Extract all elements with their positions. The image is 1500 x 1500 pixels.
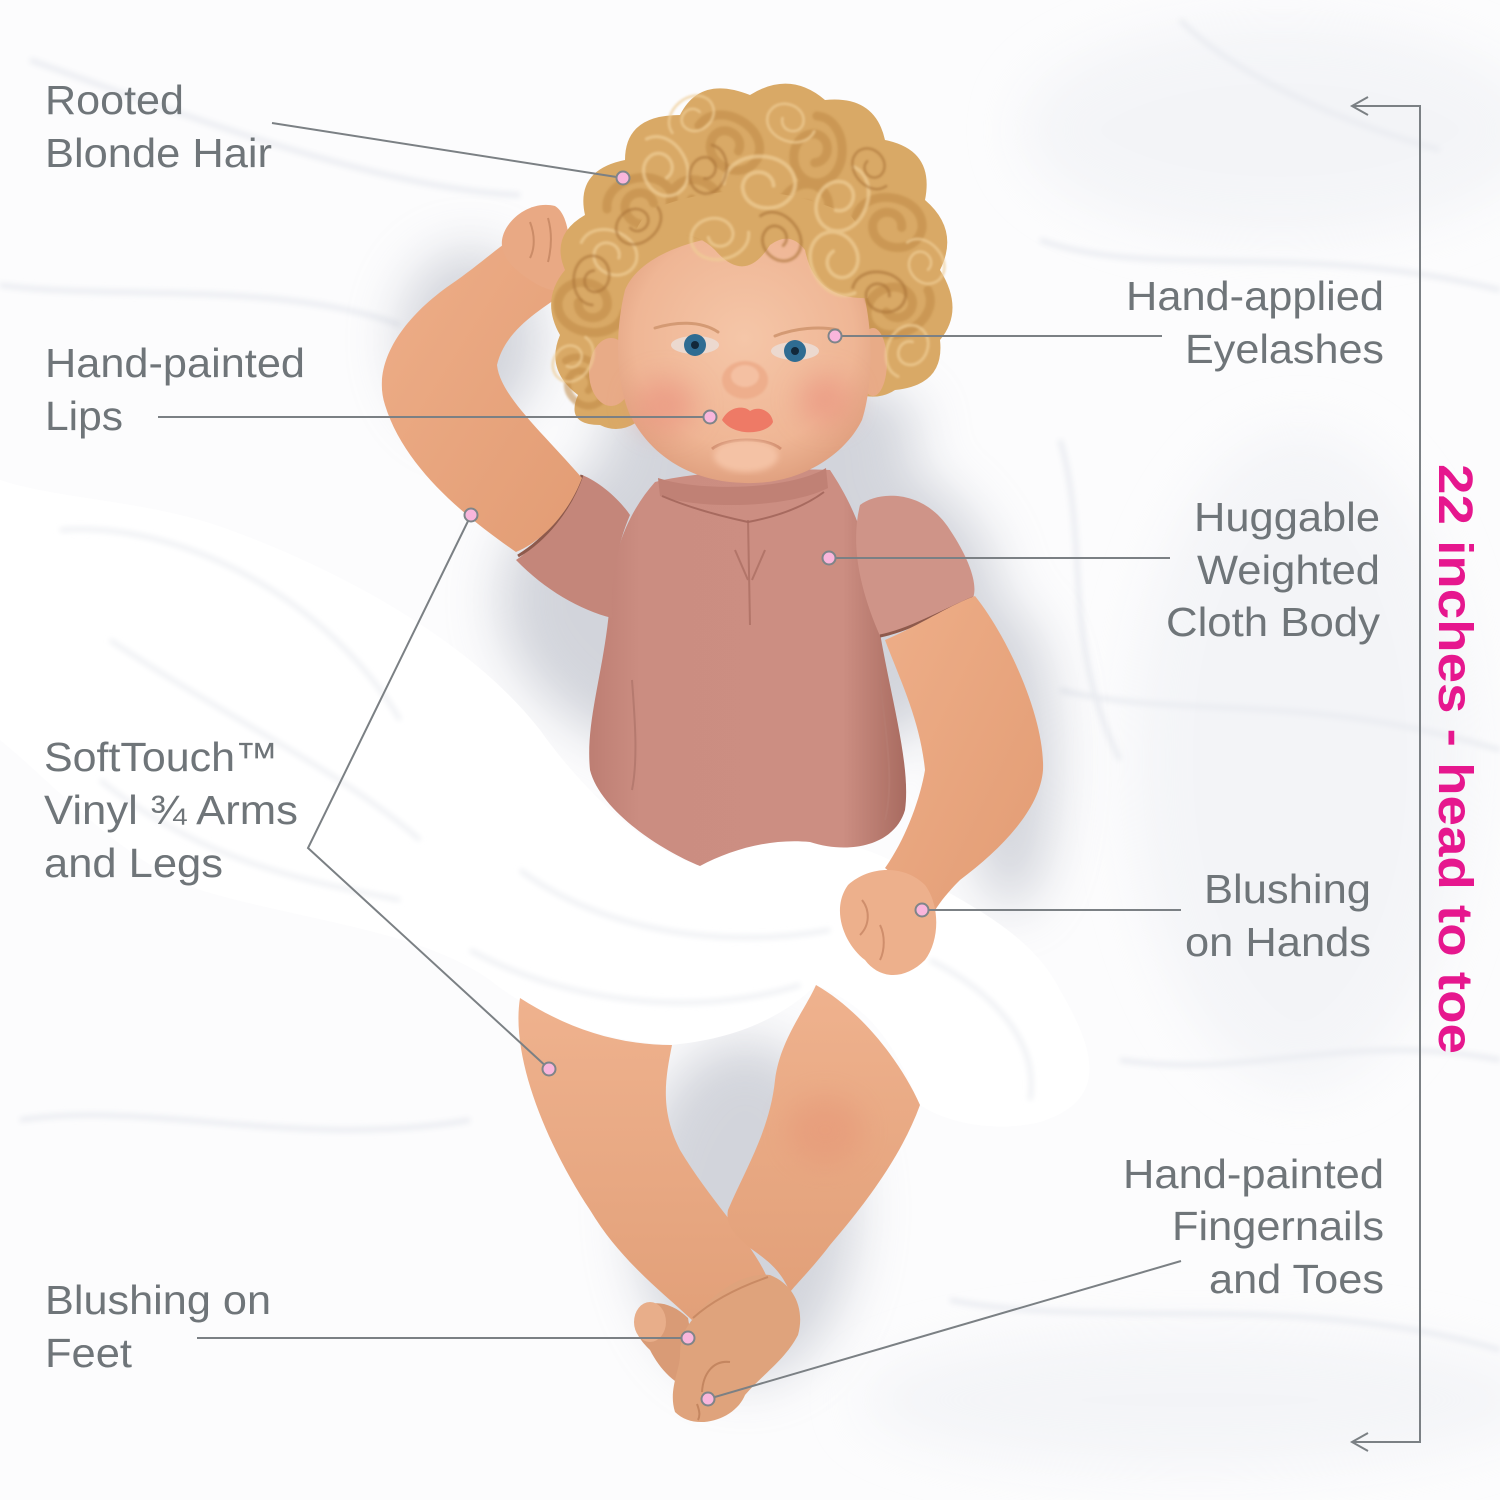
eyes	[671, 336, 719, 354]
label: hand-applied eyelashes: Eyelashes	[1185, 326, 1384, 372]
label: blushing on hands: Blushing	[1204, 866, 1371, 912]
label: cloth body	[822, 494, 1381, 645]
label: fingernails and toes: Hand-painted	[1123, 1151, 1384, 1197]
label: blushing on feet: Feet	[45, 1330, 133, 1376]
soft shadow under doll	[400, 250, 1055, 1380]
collar	[658, 468, 828, 505]
cloth body	[589, 469, 906, 866]
label: blushing on feet	[45, 1277, 694, 1376]
label: cloth body: Cloth Body	[1166, 599, 1381, 645]
label: fingernails and toes: Fingernails	[1172, 1203, 1384, 1249]
hair curls back layer	[551, 101, 939, 413]
chin	[712, 440, 781, 449]
lower hand	[840, 870, 936, 975]
label: rooted blonde hair	[45, 77, 630, 184]
label: hand-painted lips: Hand-painted	[45, 340, 305, 386]
height label: 22 inches - head to toe	[1428, 464, 1481, 1054]
raised hand	[502, 205, 570, 290]
label: hand-painted lips: Lips	[45, 393, 123, 439]
label: blushing on hands: on Hands	[1185, 919, 1371, 965]
lower arm	[885, 596, 1043, 918]
label: rooted blonde hair: Blonde Hair	[45, 130, 272, 176]
nose	[722, 361, 768, 399]
label: rooted blonde hair: Rooted	[45, 77, 184, 123]
hair fringe	[622, 191, 871, 298]
label: cloth body: Weighted	[1197, 547, 1380, 593]
lips	[722, 408, 773, 432]
label: fingernails and toes: and Toes	[1209, 1256, 1384, 1302]
left sleeve	[516, 475, 630, 618]
label: softtouch vinyl	[44, 508, 556, 1076]
hair back	[551, 84, 952, 429]
right leg	[727, 985, 920, 1292]
brows	[655, 323, 838, 336]
label: hand-applied eyelashes	[828, 273, 1384, 372]
ears	[589, 328, 887, 406]
label: fingernails and toes	[702, 1151, 1384, 1406]
label: cloth body: Huggable	[1194, 494, 1380, 540]
label: softtouch vinyl: and Legs	[44, 840, 223, 886]
label: blushing on feet: Blushing on	[45, 1277, 271, 1323]
right sleeve	[856, 496, 974, 636]
cheeks	[635, 376, 851, 431]
hair curls front	[545, 88, 952, 389]
raised arm	[382, 240, 582, 552]
doll	[382, 84, 1043, 1422]
vertical dimension arrow	[1352, 97, 1420, 1451]
label: blushing on hands	[916, 866, 1371, 965]
blanket drape	[0, 480, 1089, 1127]
label: softtouch vinyl: Vinyl ¾ Arms	[44, 787, 298, 833]
face	[618, 234, 871, 483]
back foot	[636, 1303, 700, 1388]
label: hand-painted lips	[45, 340, 716, 439]
front foot	[673, 1275, 800, 1422]
label: hand-applied eyelashes: Hand-applied	[1126, 273, 1384, 319]
left leg	[518, 998, 766, 1320]
label: softtouch vinyl: SoftTouch™	[44, 734, 278, 780]
